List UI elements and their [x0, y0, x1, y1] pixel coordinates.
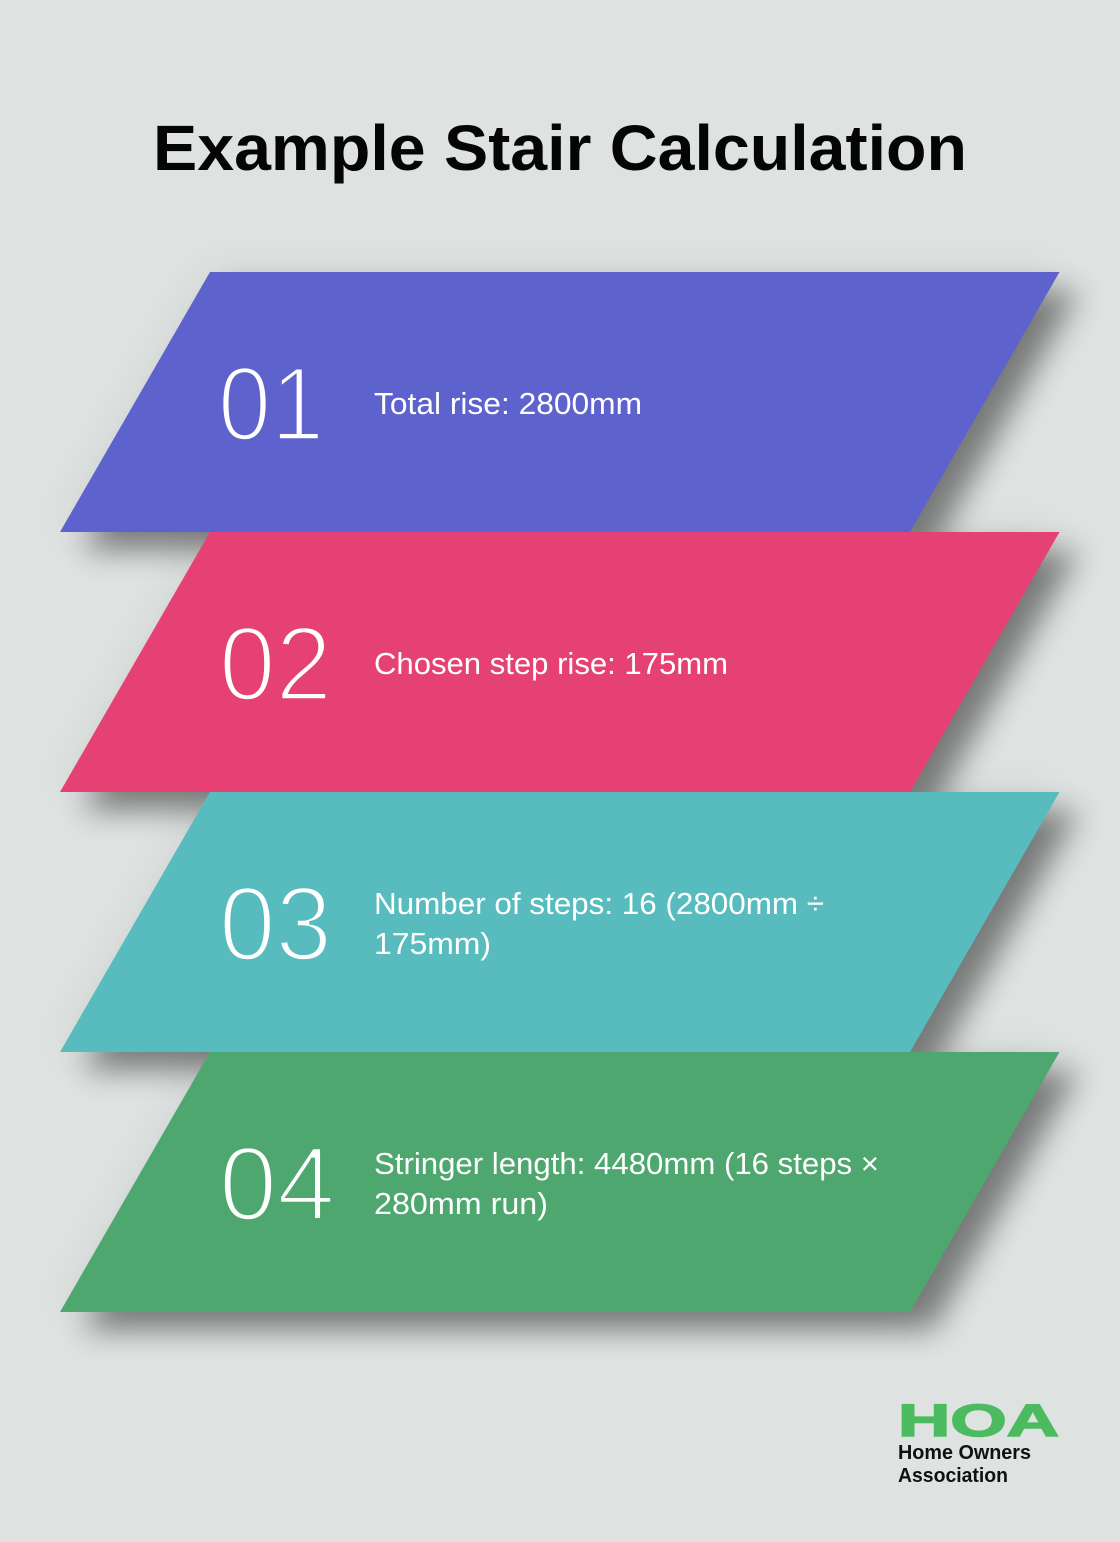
text: stringer length: 280mm run)	[374, 1186, 548, 1221]
text: number of steps: 175mm)	[374, 926, 491, 961]
text: number of steps	[374, 886, 824, 961]
title: Example Stair Calculation	[153, 112, 967, 184]
text: total rise: Total rise: 2800mm	[374, 386, 642, 421]
logo: Home Owners Association: HOA	[898, 1395, 1059, 1446]
panel: step 01	[60, 272, 1060, 532]
text: number of steps: Number of steps: 16 (2800mm ÷	[374, 886, 824, 921]
text: stringer length	[374, 1146, 879, 1221]
logo: Home Owners Association	[898, 1395, 1059, 1487]
stair shadows	[60, 272, 1079, 1330]
panel: step 04	[60, 1052, 1060, 1312]
number 03: 03	[219, 866, 332, 983]
number 02: 02	[219, 606, 332, 723]
logo: Home Owners Association: Association	[898, 1465, 1008, 1487]
panel: step 02	[60, 532, 1060, 792]
text: stringer length: Stringer length: 4480mm (16 steps ×	[374, 1146, 879, 1181]
number 04: 04	[219, 1126, 335, 1243]
number 01: 01	[218, 346, 324, 463]
panel: step 03	[60, 792, 1060, 1052]
logo: Home Owners Association: Home Owners	[898, 1442, 1031, 1464]
text: chosen step rise: Chosen step rise: 175mm	[374, 646, 728, 681]
